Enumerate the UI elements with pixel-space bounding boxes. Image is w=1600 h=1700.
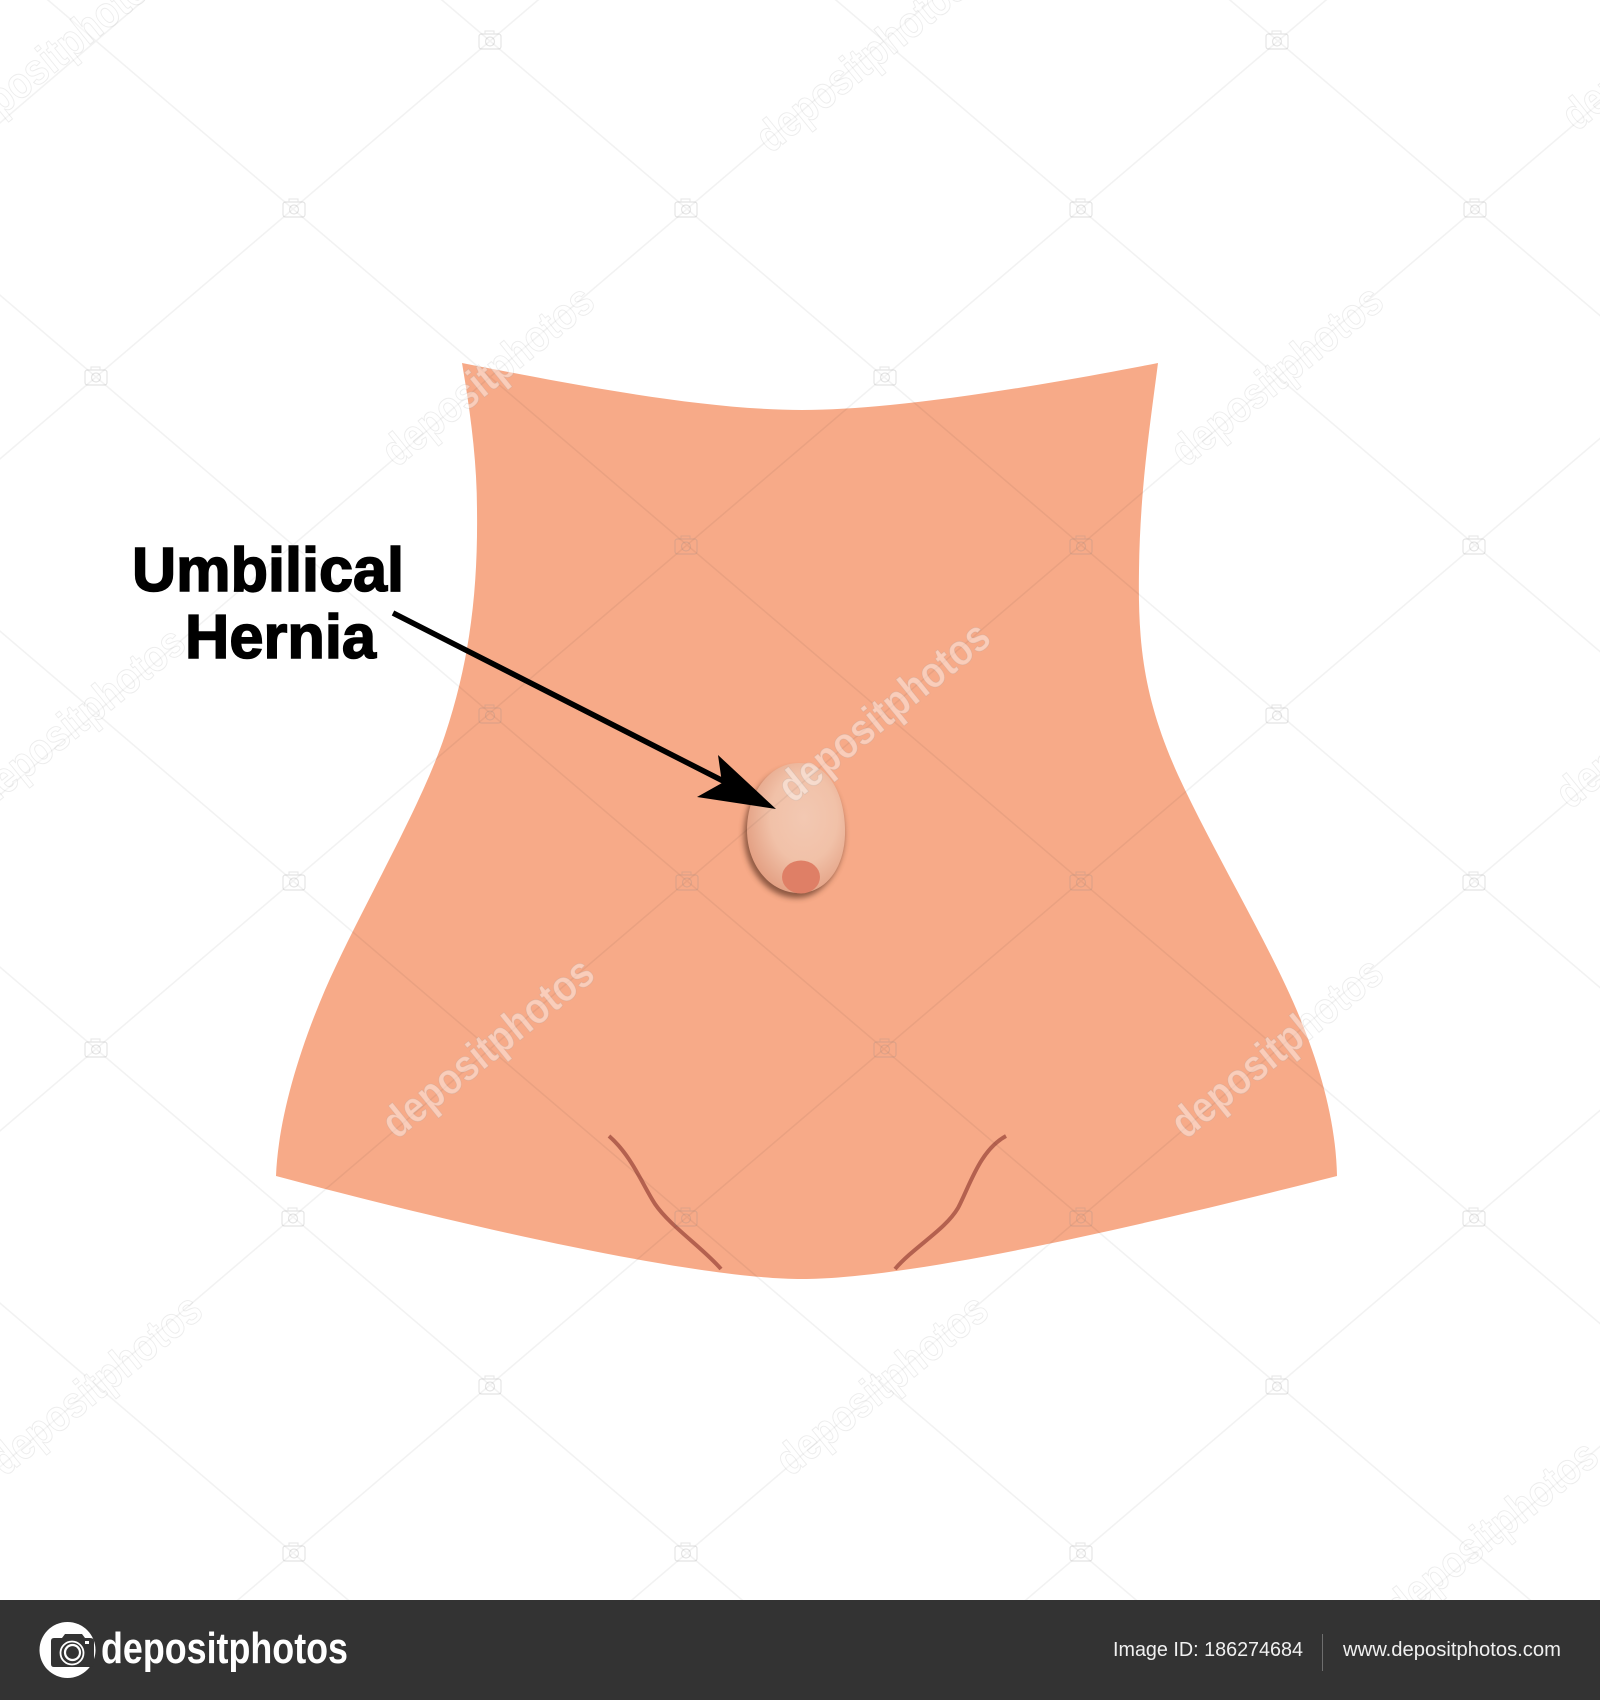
website url: www.depositphotos.com <box>1342 1639 1561 1661</box>
footer divider <box>1322 1634 1323 1671</box>
footer bar <box>0 1600 1600 1700</box>
label: Umbilical Hernia <box>132 536 404 672</box>
brand name: depositphotos <box>101 1624 348 1673</box>
bulge shadow <box>744 768 844 898</box>
watermark text: depositphotos <box>372 948 604 1148</box>
navel spot <box>782 860 820 894</box>
bulge dome <box>747 763 845 893</box>
watermark text: depositphotos <box>1161 948 1393 1148</box>
left groin crease <box>609 1136 721 1269</box>
label line 2: Hernia <box>185 603 377 672</box>
watermark text: depositphotos <box>768 612 1000 812</box>
label line 1: Umbilical <box>132 536 404 605</box>
watermark camera icons <box>85 31 1486 1561</box>
watermark text: depositphotos <box>1161 276 1393 476</box>
torso illustration <box>276 363 1337 1279</box>
watermark text: depositphotos <box>372 276 604 476</box>
watermark text: depositphotos <box>766 1285 998 1485</box>
image id: Image ID: 186274684 <box>1113 1639 1303 1661</box>
arrow pointing to hernia <box>393 613 776 809</box>
torso body shape <box>276 363 1337 1279</box>
icon: depositphotos camera logo <box>40 1622 96 1678</box>
umbilical hernia bulge <box>744 763 845 898</box>
right groin crease <box>895 1136 1006 1269</box>
